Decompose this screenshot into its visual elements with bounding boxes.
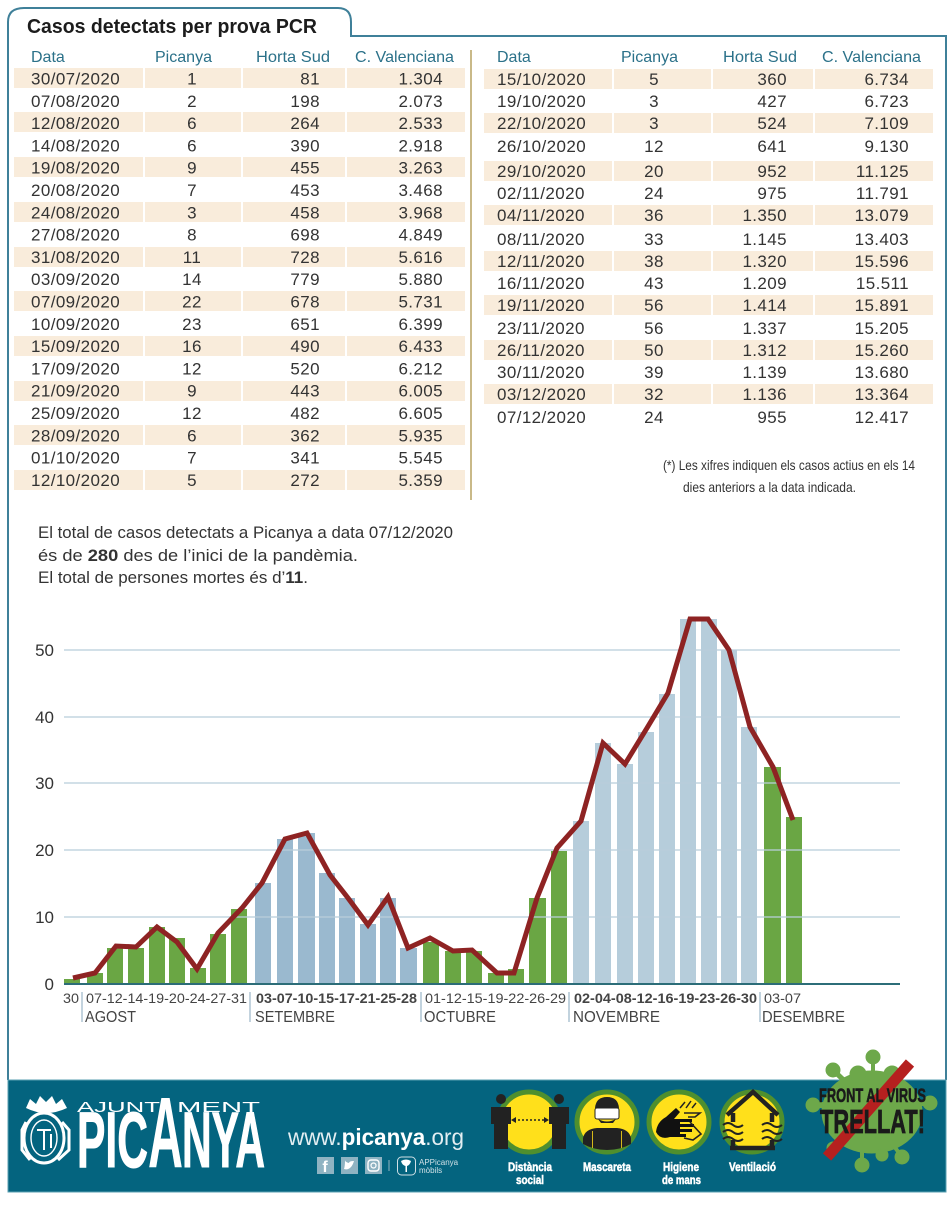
table data right: 56 (644, 296, 664, 315)
table data left: 12 (182, 359, 202, 378)
bars september (255, 833, 417, 984)
table data left: 19/08/2020 (31, 159, 120, 178)
icon labels: social (516, 1173, 544, 1187)
table data right: 955 (757, 408, 787, 427)
icon labels (508, 1160, 776, 1187)
table data right: 9.130 (864, 137, 909, 156)
table data right: 19/10/2020 (497, 92, 586, 111)
table data left: 390 (290, 136, 320, 155)
table: right (484, 49, 933, 427)
table data left: 6 (187, 426, 197, 445)
table data right: 19/11/2020 (497, 296, 585, 315)
badge text (819, 1086, 926, 1140)
y axis labels: 40 (35, 708, 54, 727)
x axis date labels (63, 990, 801, 1006)
icon: municipal crest (22, 1096, 69, 1163)
x axis date labels: 02-04-08-12-16-19-23-26-30 (574, 990, 757, 1006)
table data left: 5.359 (398, 471, 443, 490)
table data right: 03/12/2020 (497, 385, 586, 404)
table data left: 455 (290, 159, 320, 178)
table data right: 24 (644, 184, 664, 203)
table header right: Data (497, 49, 531, 66)
table data right: 1.209 (742, 274, 787, 293)
table data left: 2.073 (398, 92, 443, 111)
table data left: 28/09/2020 (31, 426, 120, 445)
table data left: 272 (290, 471, 320, 490)
social icons: APPicanya (419, 1158, 459, 1167)
table data left: 453 (290, 181, 320, 200)
table data right: 11.125 (856, 162, 909, 181)
table data left: 482 (290, 404, 320, 423)
table data left: 2.533 (398, 114, 443, 133)
table data left: 520 (290, 359, 320, 378)
icon labels: Mascareta (583, 1160, 631, 1174)
logo wordmark: A (148, 1077, 183, 1189)
virus badge (806, 1050, 937, 1172)
y axis labels: 10 (35, 908, 54, 927)
table data right: 6.723 (864, 92, 909, 111)
table data right: 15.205 (855, 319, 909, 338)
table data left: 443 (290, 382, 320, 401)
table data left: 5.880 (398, 270, 443, 289)
bars november (573, 619, 757, 984)
table data left: 31/08/2020 (31, 248, 120, 267)
table data right: 23/11/2020 (497, 319, 585, 338)
table data right: 1.139 (742, 363, 787, 382)
table data right: 36 (644, 206, 664, 225)
table data right: 07/12/2020 (497, 408, 586, 427)
x axis date labels: 30 (63, 990, 79, 1006)
table data right: 11.791 (856, 184, 909, 203)
table data left: 5.616 (398, 248, 443, 267)
table data right: 7.109 (864, 114, 909, 133)
summary text: és de 280 des de l’inici de la pandèmia. (38, 546, 358, 565)
y axis labels: 30 (35, 774, 54, 793)
y axis labels: 50 (35, 641, 54, 660)
table data right: 38 (644, 252, 664, 271)
table data right: 1.350 (742, 206, 787, 225)
table data right: 33 (644, 230, 664, 249)
table header right (497, 49, 921, 66)
summary text: El total de casos detectats a Picanya a data 07/12/2020 (38, 523, 453, 542)
table data left: 6 (187, 136, 197, 155)
table header right: C. Valenciana (822, 49, 921, 66)
table data right: 12/11/2020 (497, 252, 585, 271)
table data right: 1.414 (742, 296, 787, 315)
table data left: 651 (290, 315, 320, 334)
table data left: 6.605 (398, 404, 443, 423)
table data right: 15.511 (856, 274, 909, 293)
social icons (317, 1157, 459, 1176)
logo wordmark: AJUNT (77, 1099, 160, 1116)
table data left: 728 (290, 248, 320, 267)
table data right: 04/11/2020 (497, 206, 585, 225)
table data left: 07/09/2020 (31, 292, 120, 312)
table data left: 27/08/2020 (31, 226, 120, 245)
table data right: 26/10/2020 (497, 137, 586, 156)
table header left: Horta Sud (256, 49, 330, 66)
bar chart (35, 619, 900, 1026)
social icons: mòbils (419, 1166, 442, 1175)
icon: face mask (577, 1092, 637, 1152)
table data right: 43 (644, 274, 664, 293)
summary text: El total de persones mortes és d’11. (38, 568, 308, 587)
table header left: C. Valenciana (355, 49, 454, 66)
table data right: 39 (644, 363, 664, 382)
table data left: 458 (290, 203, 320, 222)
icon: hand hygiene (649, 1092, 709, 1152)
table data left: 1.304 (398, 70, 443, 88)
row stripes left (14, 68, 465, 490)
table data left: 24/08/2020 (31, 203, 120, 222)
logo wordmark (77, 1077, 265, 1189)
table data right: 08/11/2020 (497, 230, 585, 249)
table data right: 524 (757, 114, 787, 133)
table header left (31, 49, 454, 66)
table header right: Picanya (621, 49, 678, 66)
table data right: 15/10/2020 (497, 70, 586, 89)
table data left: 698 (290, 226, 320, 245)
table data right: 22/10/2020 (497, 114, 586, 133)
table data left: 6 (187, 114, 197, 133)
logo wordmark: NYA (182, 1095, 265, 1184)
bars december (764, 767, 802, 984)
table data right: 50 (644, 341, 664, 360)
icon labels: Distància (508, 1160, 552, 1174)
table data left: 22 (182, 292, 202, 312)
table data left: 15/09/2020 (31, 337, 120, 356)
table data left: 14 (182, 270, 202, 289)
table data left: 07/08/2020 (31, 92, 120, 111)
table data right: 641 (757, 137, 787, 156)
footnote (663, 457, 915, 495)
icon labels: Ventilació (729, 1160, 776, 1174)
table data right: 15.891 (855, 296, 909, 315)
x axis month labels (85, 1009, 845, 1026)
table data left: 10/09/2020 (31, 315, 120, 334)
x axis date labels: 03-07 (764, 990, 801, 1006)
table data left: 9 (187, 159, 197, 178)
table header left: Data (31, 49, 65, 66)
table data left: 17/09/2020 (31, 359, 120, 378)
x axis month labels: AGOST (85, 1009, 136, 1026)
red slash (827, 1063, 910, 1157)
table header right: Horta Sud (723, 49, 797, 66)
table data left: 198 (290, 92, 320, 111)
x axis month labels: SETEMBRE (255, 1009, 335, 1026)
table data right: 26/11/2020 (497, 341, 585, 360)
icon: social distance (491, 1092, 569, 1152)
table data right: 1.136 (742, 385, 787, 404)
bars august (64, 909, 247, 984)
table data left: 12/08/2020 (31, 114, 120, 133)
footnote: dies anteriors a la data indicada. (683, 479, 856, 495)
table data right: 12.417 (855, 408, 909, 427)
table data right: 975 (757, 184, 787, 203)
x axis date labels: 03-07-10-15-17-21-25-28 (256, 990, 417, 1006)
footer band (8, 1080, 946, 1192)
bars october (423, 851, 567, 984)
x axis month labels: NOVEMBRE (573, 1009, 660, 1026)
table data left: 21/09/2020 (31, 382, 120, 401)
table data left (31, 70, 443, 490)
table data left: 6.399 (398, 315, 443, 334)
table data left: 8 (187, 226, 197, 245)
table data left: 678 (290, 292, 320, 312)
table data left: 23 (182, 315, 202, 334)
table data left: 5.935 (398, 426, 443, 445)
table data right: 13.079 (855, 206, 909, 225)
table data right: 427 (757, 92, 787, 111)
table data left: 25/09/2020 (31, 404, 120, 423)
table data right: 12 (644, 137, 664, 156)
icon labels: de mans (662, 1173, 701, 1187)
table data left: 5.545 (398, 449, 443, 468)
table data left: 12 (182, 404, 202, 423)
table data left: 20/08/2020 (31, 181, 120, 200)
table data right: 3 (649, 92, 659, 111)
table data left: 6.005 (398, 382, 443, 401)
table data left: 2.918 (398, 136, 443, 155)
table data left: 779 (290, 270, 320, 289)
table data left: 03/09/2020 (31, 270, 120, 289)
table data left: 7 (187, 181, 197, 200)
x axis month labels: OCTUBRE (424, 1009, 496, 1026)
website url: www.picanya.org (287, 1124, 464, 1150)
table data right: 24 (644, 408, 664, 427)
y axis labels (35, 641, 54, 994)
table header left: Picanya (155, 49, 212, 66)
table data right: 1.145 (742, 230, 787, 249)
row stripes right (484, 69, 933, 404)
table data left: 9 (187, 382, 197, 401)
table data right: 1.320 (742, 252, 787, 271)
table data left: 16 (182, 337, 202, 356)
trend line (73, 619, 793, 978)
table data left: 81 (300, 70, 320, 88)
summary text (38, 523, 453, 587)
table data right (497, 70, 909, 427)
table data right: 15.260 (855, 341, 909, 360)
icon labels: Higiene (663, 1160, 699, 1174)
table data right: 6.734 (864, 70, 909, 89)
table data right: 56 (644, 319, 664, 338)
table data left: 5.731 (398, 292, 443, 312)
table data left: 7 (187, 449, 197, 468)
table data right: 29/10/2020 (497, 162, 586, 181)
icon: ventilation (722, 1092, 782, 1152)
table data right: 13.403 (855, 230, 909, 249)
table data right: 32 (644, 385, 664, 404)
table data right: 952 (757, 162, 787, 181)
table data left: 11 (183, 248, 201, 267)
table data left: 30/07/2020 (31, 70, 120, 88)
table data right: 13.680 (855, 363, 909, 382)
table data right: 360 (757, 70, 787, 89)
table data left: 3.468 (398, 181, 443, 200)
table data left: 3.968 (398, 203, 443, 222)
table data left: 264 (290, 114, 320, 133)
table data right: 30/11/2020 (497, 363, 585, 382)
table data left: 2 (187, 92, 197, 111)
x axis month labels: DESEMBRE (762, 1009, 845, 1026)
y axis labels: 20 (35, 841, 54, 860)
table data left: 362 (290, 426, 320, 445)
table data right: 20 (644, 162, 664, 181)
table data left: 1 (187, 70, 197, 88)
logo wordmark: MENT (177, 1099, 260, 1116)
title: Casos detectats per prova PCR (27, 16, 318, 38)
table data right: 1.312 (742, 341, 787, 360)
virus body (806, 1050, 937, 1172)
table data right: 5 (649, 70, 659, 89)
social icons: f (322, 1159, 328, 1176)
table data right: 3 (649, 114, 659, 133)
x axis date labels: 01-12-15-19-22-26-29 (425, 990, 566, 1006)
table data right: 13.364 (855, 385, 909, 404)
table: left (14, 49, 465, 490)
table data left: 01/10/2020 (31, 449, 120, 468)
table data left: 14/08/2020 (31, 136, 120, 155)
table data left: 3.263 (398, 159, 443, 178)
table data left: 341 (290, 449, 320, 468)
y axis labels: 0 (45, 975, 54, 994)
table data left: 12/10/2020 (31, 471, 120, 490)
table data left: 4.849 (398, 226, 443, 245)
table data right: 1.337 (742, 319, 787, 338)
table data right: 15.596 (855, 252, 909, 271)
table data left: 3 (187, 203, 197, 222)
table data right: 16/11/2020 (497, 274, 585, 293)
table data right: 02/11/2020 (497, 184, 585, 203)
table data left: 6.212 (398, 359, 443, 378)
logo wordmark: PIC (77, 1095, 148, 1184)
table data left: 6.433 (398, 337, 443, 356)
x axis date labels: 07-12-14-19-20-24-27-31 (86, 990, 247, 1006)
table data left: 490 (290, 337, 320, 356)
table data left: 5 (187, 471, 197, 490)
